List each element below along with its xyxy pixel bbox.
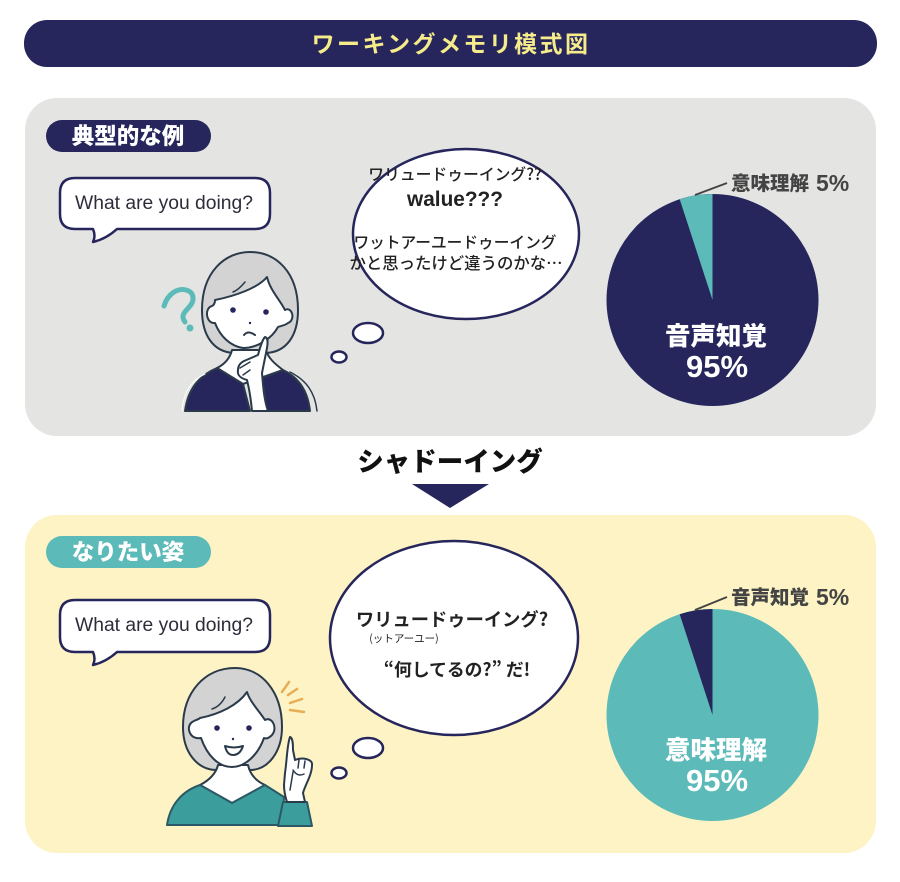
thought bubble	[332, 149, 579, 362]
thought bubble: “何してるの?” だ!	[384, 656, 530, 682]
pie callout	[695, 581, 849, 610]
title: ワーキングメモリ模式図	[312, 25, 590, 59]
pie chart: meaning comprehension 95%	[606, 609, 818, 821]
thought bubble: (ットアーユー)	[369, 631, 439, 646]
pie chart: speech perception 95%	[606, 194, 818, 406]
speech bubble: question: What are you doing?	[75, 193, 253, 214]
icon: question mark	[164, 290, 193, 330]
tag: typical example	[46, 119, 211, 152]
pie callout	[695, 167, 849, 196]
thought bubble: walue???	[406, 188, 503, 211]
speech bubble: question: What are you doing?	[75, 615, 253, 636]
character: smiling woman	[167, 668, 312, 826]
pie callout: 5%	[816, 584, 849, 610]
pie callout: 音声知覚	[731, 581, 809, 610]
pie chart: speech perception 95%: 95%	[686, 349, 748, 384]
arrow	[412, 484, 489, 508]
pie label: 音声知覚	[665, 316, 767, 353]
speech bubble: question	[60, 178, 270, 242]
thought bubble: ワリュードゥーイング?	[356, 606, 548, 632]
panel: ideal state	[25, 515, 876, 853]
pie callout: 意味理解	[731, 167, 810, 196]
icon: idea sparks	[282, 682, 304, 712]
pie label: 意味理解	[665, 730, 767, 767]
tag: ideal state	[46, 535, 211, 568]
thought bubble: かと思ったけど違うのかな…	[349, 250, 563, 274]
tag: typical example: 典型的な例	[72, 119, 184, 151]
thought bubble: ワットアーユードゥーイング	[354, 230, 557, 253]
title bar	[24, 20, 877, 67]
heading: shadowing: シャドーイング	[357, 440, 543, 479]
speech bubble: question	[60, 600, 270, 665]
thought bubble	[330, 541, 578, 778]
character: puzzled woman	[182, 252, 317, 411]
thought bubble: ワリュードゥーイング??	[368, 162, 542, 185]
pie chart: meaning comprehension 95%: 95%	[686, 763, 748, 798]
pie callout: 5%	[816, 170, 849, 196]
panel: typical example	[25, 98, 876, 436]
tag: ideal state: なりたい姿	[72, 535, 184, 567]
